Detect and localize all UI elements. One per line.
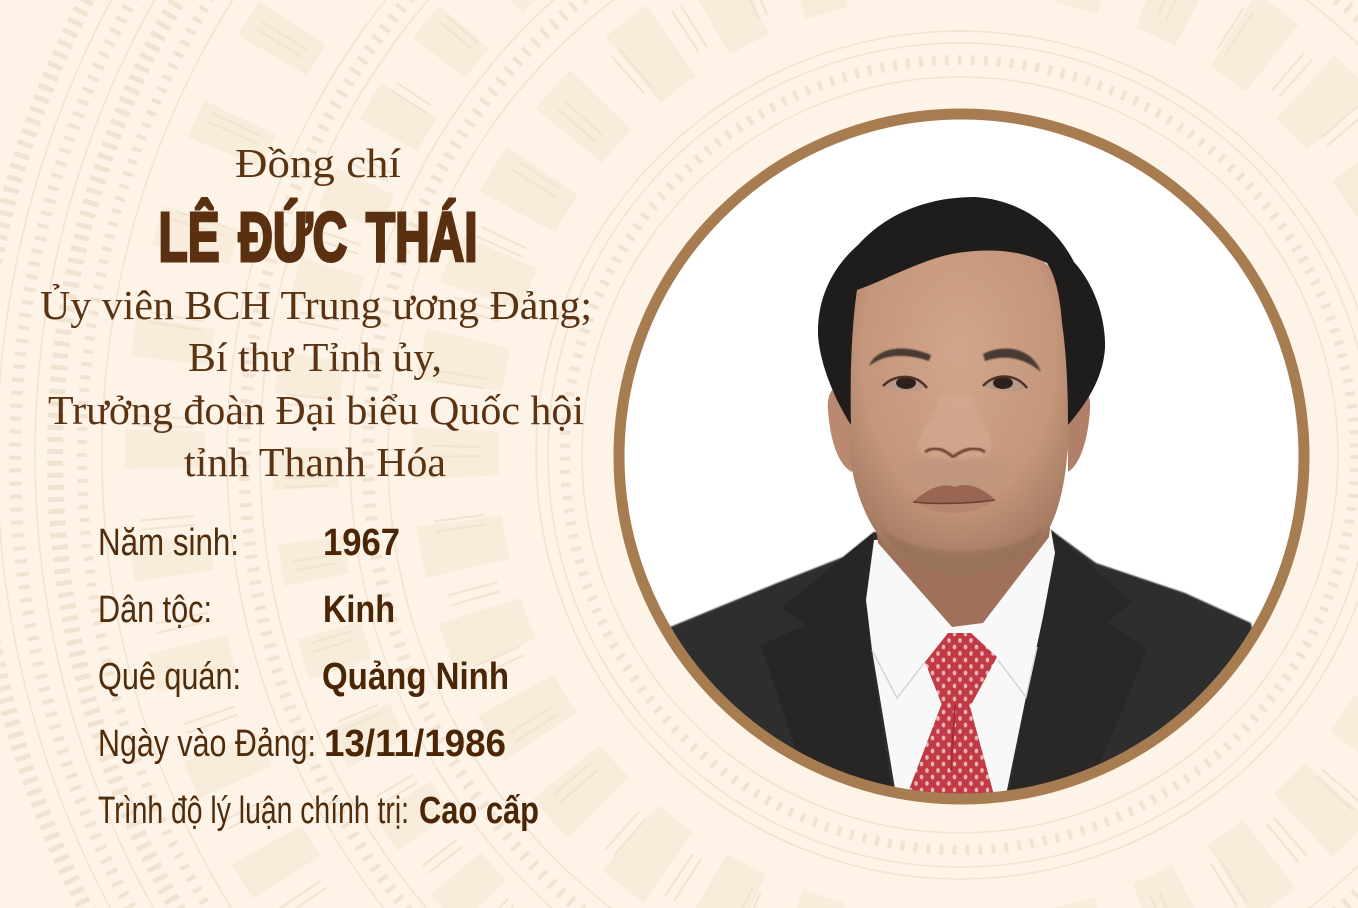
right lapel [1051, 530, 1064, 542]
collar edges [872, 647, 1037, 698]
hair [818, 197, 1105, 425]
face [850, 250, 1068, 554]
info row: ethnicity [98, 589, 395, 631]
text block: positions [40, 282, 592, 485]
info row: party admission date: Ngày vào Đảng: [98, 723, 316, 765]
info row: birth year: Năm sinh: [98, 522, 239, 564]
muzzle shading [954, 468, 958, 469]
nose [920, 416, 990, 458]
info row: hometown: Quảng Ninh [322, 656, 509, 698]
text block: positions: Trưởng đoàn Đại biểu Quốc hội [48, 387, 584, 433]
info row: party admission date [98, 723, 506, 765]
left eyebrow [869, 349, 931, 366]
text block: positions: Ủy viên BCH Trung ương Đảng; [40, 282, 592, 328]
info row: ethnicity: Dân tộc: [98, 589, 212, 631]
left lapel [761, 532, 891, 786]
text block: positions: Bí thư Tỉnh ủy, [188, 334, 442, 380]
portrait illustration [670, 197, 1253, 794]
chin shadow [885, 531, 1041, 574]
info row: hometown [98, 656, 509, 698]
info row: hometown: Quê quán: [98, 656, 241, 698]
info row: party admission date: 13/11/1986 [324, 723, 506, 765]
info row: birth year [98, 522, 400, 564]
left eye [883, 377, 927, 391]
mouth [913, 485, 995, 513]
suit jacket [670, 528, 1253, 790]
portrait frame ring [619, 114, 1304, 799]
tie [907, 633, 997, 795]
text block: positions: tỉnh Thanh Hóa [184, 439, 446, 485]
info row: ethnicity: Kinh [323, 589, 395, 631]
right eye [983, 376, 1027, 391]
shirt [866, 530, 1055, 795]
heading: Đồng chí: Đồng chí [235, 140, 401, 186]
portrait backdrop [624, 118, 1300, 794]
info row: political theory level: Trình độ lý luận chính trị: [98, 790, 409, 832]
neck [876, 528, 1050, 627]
right eyebrow [983, 348, 1041, 372]
left ear [828, 387, 852, 472]
right ear [1068, 387, 1090, 472]
title: name: LÊ ĐỨC THÁI [158, 197, 478, 276]
info row: political theory level: Cao cấp [419, 790, 539, 832]
info row: birth year: 1967 [323, 522, 400, 564]
